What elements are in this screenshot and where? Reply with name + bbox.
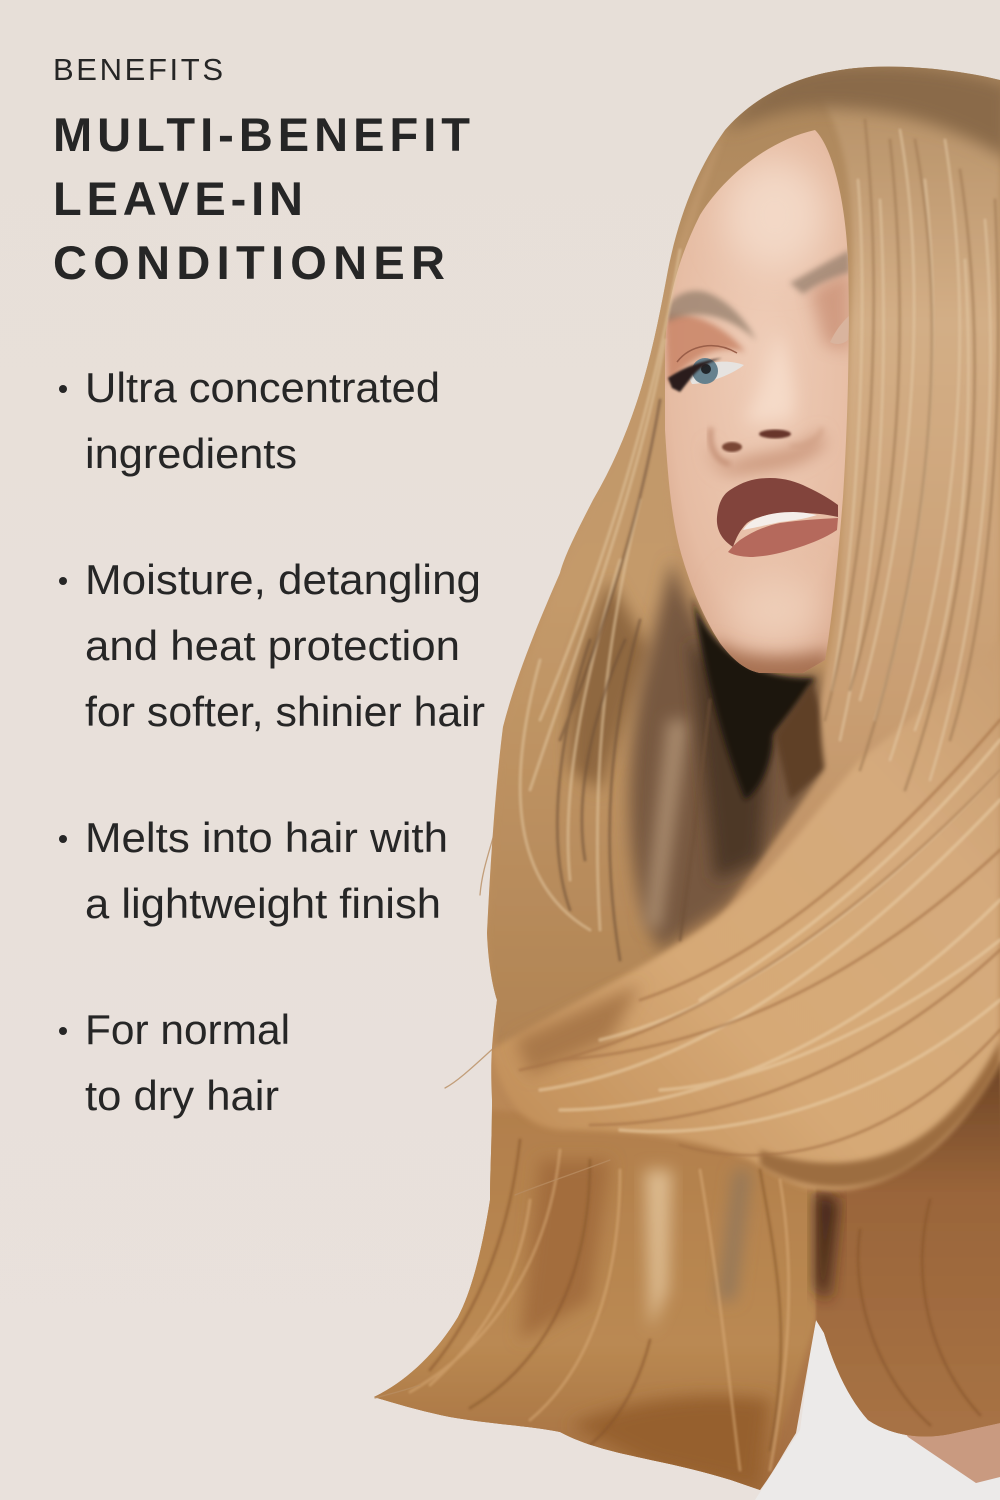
tufts by the neck — [776, 683, 827, 799]
nose tip contour — [710, 428, 730, 464]
left section light strands — [520, 250, 680, 930]
hair strands — [410, 120, 1000, 1470]
blonde highlight strip — [645, 1170, 672, 1330]
grey shadow strip — [718, 1170, 750, 1300]
iris — [692, 358, 718, 384]
right hair curtain — [720, 65, 1000, 920]
chin shadow — [716, 636, 827, 673]
nose bridge highlight — [748, 346, 797, 424]
upper lip — [717, 478, 838, 547]
right nostril — [759, 430, 791, 438]
title: MULTI-BENEFIT — [53, 108, 470, 161]
title — [53, 108, 470, 289]
light strands: right curtain — [832, 130, 990, 780]
teeth — [743, 512, 817, 530]
left hair section — [487, 276, 667, 1040]
eye crease — [677, 346, 737, 362]
sweeping golden band — [492, 722, 1000, 1194]
nose wing — [790, 428, 822, 446]
benefit: concentrated ingredients: ingredients — [85, 430, 297, 477]
benefit: lightweight finish — [59, 814, 448, 927]
title: LEAVE-IN — [53, 172, 303, 225]
benefit: hair type: to dry hair — [85, 1072, 279, 1119]
lower section dark strands — [430, 1140, 980, 1450]
benefit: moisture and protection: Moisture, detangling — [85, 556, 481, 603]
sweep shadows — [520, 720, 1000, 1155]
flyaway hairs — [375, 820, 610, 1398]
forehead highlight — [725, 160, 825, 270]
title: CONDITIONER — [53, 236, 445, 289]
right eyebrow — [790, 250, 850, 294]
left eyebrow — [665, 291, 756, 340]
benefit: concentrated ingredients — [59, 364, 440, 477]
dark lower-right hair — [816, 1060, 1000, 1440]
sweep underside shadow — [760, 1040, 1000, 1187]
sweep highlights — [540, 740, 1000, 1131]
neck skin — [900, 1410, 1000, 1483]
right eye shadow — [810, 270, 850, 350]
brown left lobe shade — [569, 580, 650, 790]
benefit: lightweight finish: a lightweight finish — [85, 880, 441, 927]
benefit: moisture and protection: for softer, shinier hair — [85, 688, 485, 735]
lower bottom dark fringe — [570, 1396, 770, 1490]
hair base — [360, 50, 1000, 1500]
lower hair — [360, 1110, 816, 1500]
lower lip — [728, 518, 838, 557]
pupil — [701, 364, 711, 374]
photo: model with long blonde hair — [360, 50, 1000, 1500]
left section dark strands — [557, 400, 710, 960]
right eye corner — [830, 315, 850, 344]
face — [665, 130, 849, 673]
lower darker band — [520, 1160, 610, 1340]
benefit: hair type: For normal — [85, 1006, 290, 1053]
dark crease — [816, 1190, 838, 1300]
cheek highlight — [730, 575, 820, 645]
dark under-hair shadow — [630, 560, 825, 950]
lower section light strands — [410, 1150, 789, 1470]
nose underside shadow — [709, 430, 825, 475]
benefit: hair type — [59, 1006, 290, 1119]
hair crown shading — [725, 63, 1000, 160]
benefit: moisture and protection — [59, 556, 485, 735]
hair mass — [360, 50, 1000, 1500]
light streak in shadow — [645, 720, 688, 930]
left nostril — [722, 442, 742, 452]
benefit list — [59, 364, 485, 1119]
dark neck band — [690, 640, 770, 880]
benefit: lightweight finish: Melts into hair with — [85, 814, 448, 861]
eye white — [688, 362, 744, 384]
eyeshadow — [665, 314, 745, 385]
benefit: concentrated ingredients: Ultra concentrated — [85, 364, 440, 411]
black neck wedge — [692, 595, 815, 800]
eyebrow label: BENEFITS — [53, 52, 223, 87]
brown patches on sweep — [515, 985, 640, 1075]
white ribbed top — [755, 1310, 1000, 1500]
dark strands: right curtain — [825, 120, 998, 790]
benefit: moisture and protection: and heat protection — [85, 622, 460, 669]
lashes — [668, 358, 722, 392]
